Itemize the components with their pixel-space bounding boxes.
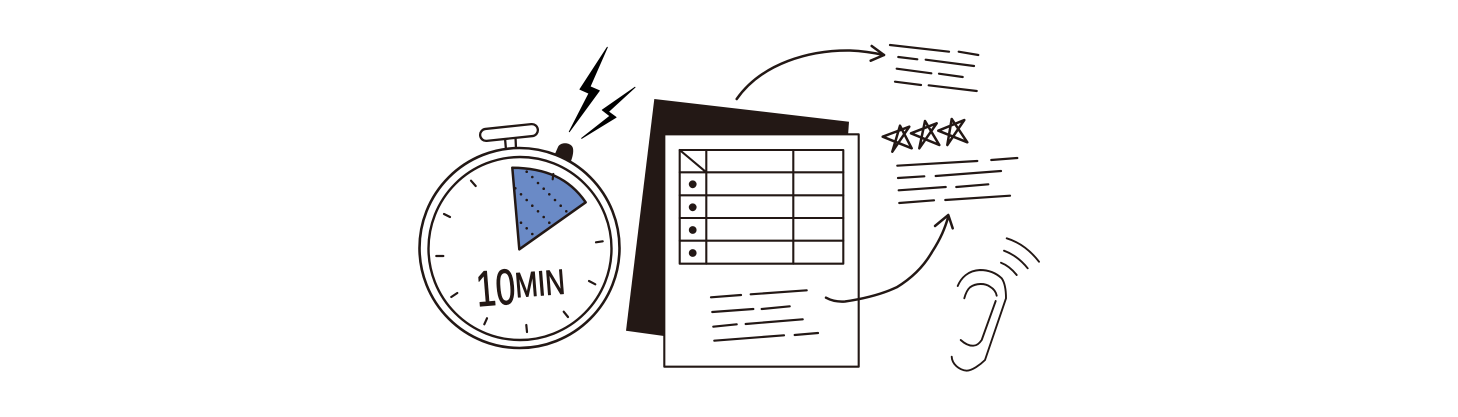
label: 10MIN: 10 bbox=[474, 258, 517, 317]
paper bbox=[664, 134, 859, 367]
minute ticks bbox=[436, 174, 603, 332]
wedge dots bbox=[514, 170, 568, 235]
review text lines bbox=[897, 158, 1017, 203]
label: 10MIN bbox=[474, 255, 567, 317]
icon: three stars bbox=[883, 119, 967, 152]
sound waves bbox=[1001, 238, 1039, 275]
arrow to notes bbox=[737, 46, 884, 99]
label: 10MIN: MIN bbox=[514, 263, 566, 305]
arrow to review bbox=[826, 215, 953, 302]
bullet dots bbox=[689, 180, 697, 257]
icon: ear with sound waves bbox=[952, 238, 1039, 371]
icon: lightning bolts bbox=[569, 47, 635, 138]
icon: stopwatch bbox=[420, 124, 620, 348]
notes top right bbox=[890, 45, 978, 91]
stopwatch face bbox=[428, 157, 612, 340]
document text lines bbox=[711, 290, 818, 341]
stopwatch case bbox=[420, 148, 620, 348]
back sheet bbox=[626, 99, 849, 336]
document bbox=[664, 134, 859, 367]
blue ten minute wedge bbox=[512, 168, 586, 249]
stopwatch crown bbox=[480, 124, 538, 150]
stopwatch side button bbox=[554, 143, 573, 161]
table bbox=[680, 150, 843, 264]
